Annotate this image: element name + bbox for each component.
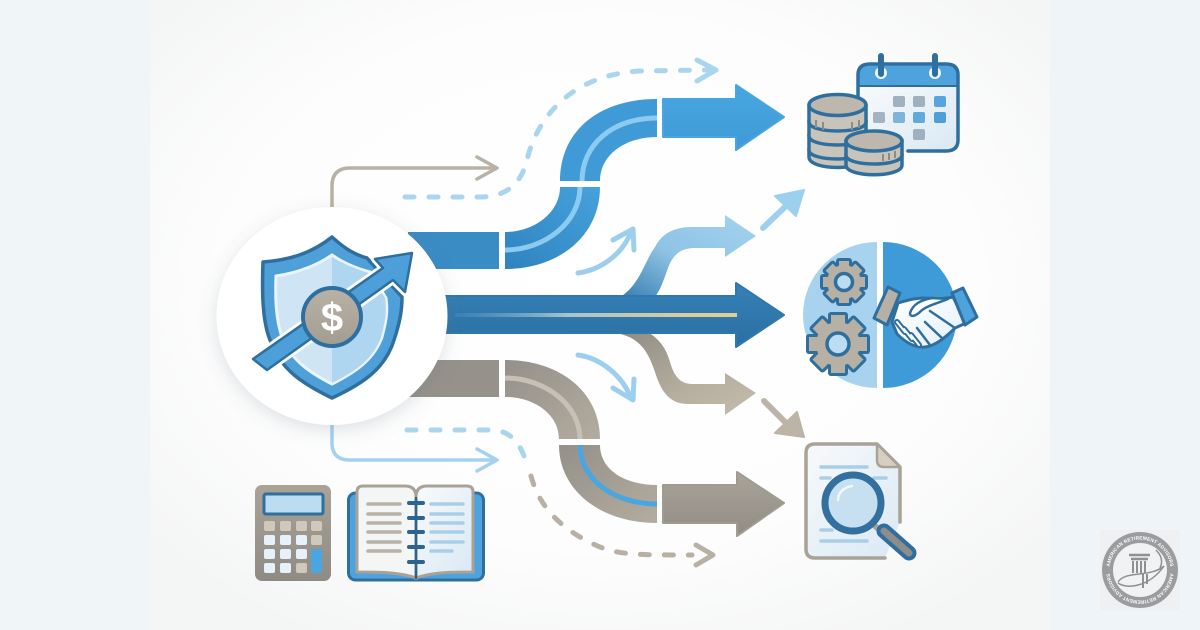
magnifier bbox=[825, 475, 909, 553]
small coin stack bbox=[846, 131, 902, 175]
text lines right bbox=[431, 504, 463, 551]
gray branch arrow bbox=[607, 332, 756, 415]
icon: document with magnifier bbox=[806, 444, 909, 558]
top dashed arrow bbox=[405, 60, 716, 197]
lower gear bbox=[806, 312, 870, 376]
upper gear bbox=[820, 258, 868, 306]
central shield badge bbox=[216, 207, 448, 425]
icon: gears and handshake bbox=[803, 242, 977, 388]
small curved arrow down bbox=[578, 355, 634, 400]
icon: rising arrow bbox=[253, 253, 412, 370]
icon: dollar coin: $ bbox=[321, 296, 343, 340]
icon: calculator bbox=[255, 485, 331, 581]
tan connector arrow bbox=[332, 157, 497, 208]
large coin stack bbox=[809, 94, 866, 168]
path: lower tan route bbox=[408, 360, 784, 536]
lower dashed arrow bbox=[407, 430, 713, 565]
spiral binding bbox=[409, 498, 423, 578]
icon: shield bbox=[263, 237, 402, 398]
logo seal bbox=[1102, 532, 1178, 608]
icon: open book bbox=[348, 486, 484, 580]
text lines left bbox=[368, 504, 400, 551]
small arrow down right bbox=[764, 401, 804, 437]
light blue connector arrow bbox=[332, 425, 497, 471]
light branch arrow bbox=[620, 215, 756, 297]
icon: coins and calendar bbox=[809, 56, 958, 175]
right half circle bbox=[883, 242, 957, 388]
path: top blue route bbox=[408, 85, 784, 269]
logo seal: AMERICAN RETIREMENT ADVISORS bbox=[1106, 536, 1174, 567]
logo seal: AMERICAN RETIREMENT ADVISORS bbox=[1106, 573, 1174, 604]
path: centre arrow bbox=[440, 283, 784, 347]
small curved arrow up bbox=[578, 229, 634, 273]
icon: dollar coin bbox=[303, 288, 361, 346]
handshake bbox=[874, 287, 977, 347]
small arrow up right bbox=[763, 190, 804, 228]
calendar bbox=[858, 56, 958, 152]
pillar emblem bbox=[1118, 550, 1164, 588]
left half circle bbox=[803, 242, 877, 388]
